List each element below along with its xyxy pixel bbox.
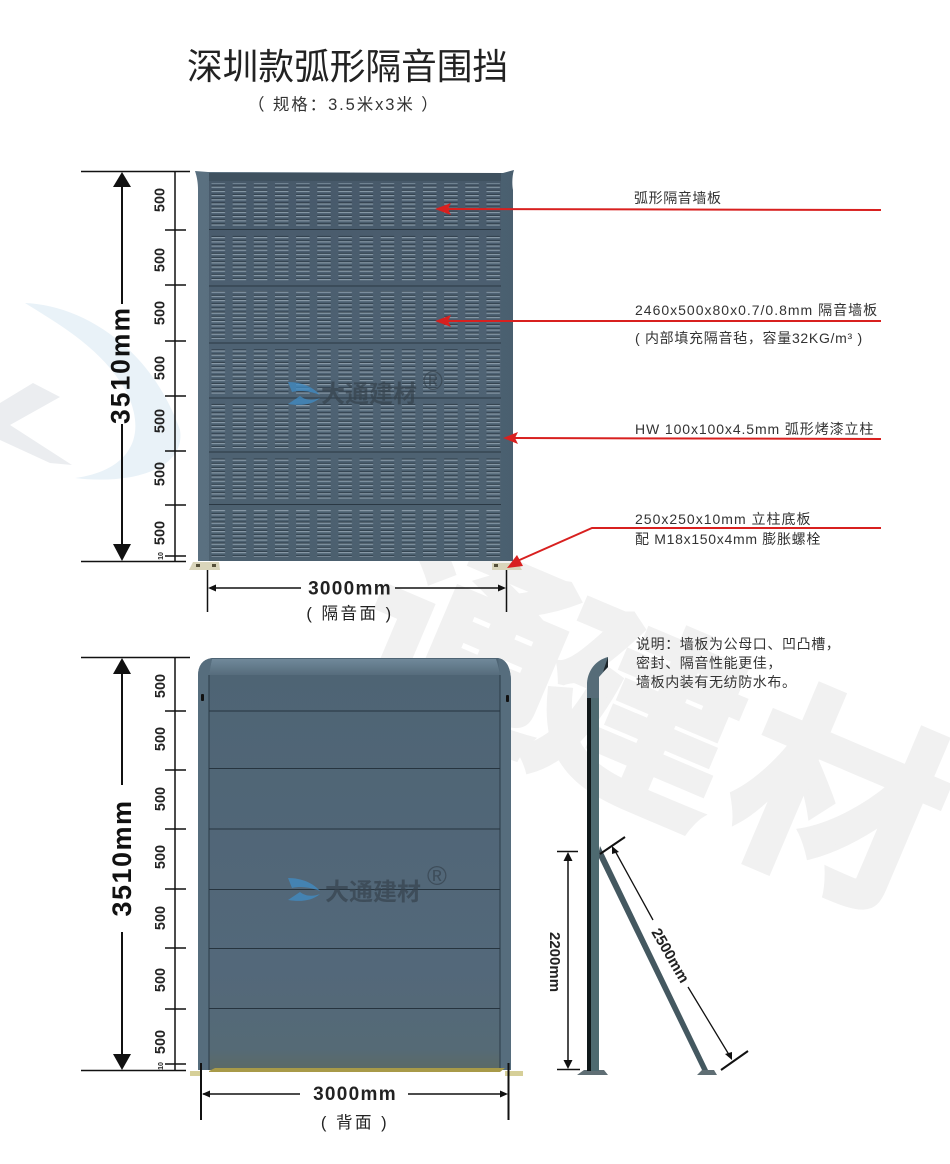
dimension 2500mm: 2500mm	[648, 925, 692, 986]
callout: base plate: 配 M18x150x4mm 膨胀螺栓	[635, 531, 821, 547]
callout: column	[503, 421, 881, 444]
front dimension: height 3510mm	[81, 172, 190, 562]
back panel	[190, 658, 523, 1076]
side view of column and strut	[577, 657, 717, 1075]
back dimension: height 3510mm: 10	[158, 1062, 165, 1070]
back dimension: height 3510mm: 500	[153, 906, 169, 930]
back logo watermark	[288, 861, 447, 906]
front dimension: height 3510mm: 500	[152, 356, 168, 380]
dimension 2200mm: 2200mm	[546, 932, 563, 992]
front logo watermark: 大通建材	[321, 381, 417, 408]
front dimension: height 3510mm: 500	[152, 521, 168, 545]
back logo watermark: ®	[427, 861, 447, 891]
callout: column: HW 100x100x4.5mm 弧形烤漆立柱	[635, 421, 874, 437]
front dimension: height 3510mm: 500	[152, 301, 168, 325]
front dimension: height 3510mm: 10	[158, 552, 165, 560]
back dimension: height 3510mm: 500	[153, 845, 169, 869]
explanation note: 说明：墙板为公母口、凹凸槽，	[636, 636, 840, 652]
callout: sound barrier panel	[435, 302, 881, 346]
title: 深圳款弧形隔音围挡	[187, 47, 508, 87]
explanation note: 密封、隔音性能更佳，	[636, 655, 782, 671]
back dimension: height 3510mm: 500	[153, 787, 169, 811]
back width dimension 3000mm	[201, 1063, 508, 1132]
callout: base plate: 250x250x10mm 立柱底板	[635, 511, 812, 527]
back dimension: height 3510mm	[81, 658, 190, 1070]
front dimension: height 3510mm: 500	[152, 409, 168, 433]
front dimension: height 3510mm: 500	[152, 188, 168, 212]
background watermark: 建	[498, 574, 776, 865]
back dimension: height 3510mm: 3510mm	[107, 799, 137, 917]
front width dimension 3000mm	[208, 570, 506, 623]
callout: curved wall panel	[435, 190, 881, 215]
front width dimension 3000mm: 3000mm	[308, 578, 392, 600]
background watermark: 通	[325, 501, 604, 792]
front logo watermark: ®	[423, 366, 443, 396]
explanation note: 墙板内装有无纺防水布。	[636, 674, 797, 690]
callout: sound barrier panel: 2460x500x80x0.7/0.8mm 隔音墙板	[635, 302, 878, 318]
back logo watermark: 大通建材	[325, 879, 421, 906]
background watermark	[0, 303, 950, 950]
back dimension: height 3510mm: 500	[153, 968, 169, 992]
dimension 2200mm	[546, 852, 580, 1070]
front dimension: height 3510mm: 500	[152, 248, 168, 272]
callout: sound barrier panel: ( 内部填充隔音毡，容量32KG/m³ )	[635, 330, 863, 346]
front logo watermark	[288, 366, 443, 408]
back dimension: height 3510mm: 500	[153, 674, 169, 698]
dimension 2500mm	[600, 837, 748, 1070]
callout: curved wall panel: 弧形隔音墙板	[634, 190, 722, 206]
back dimension: height 3510mm: 500	[153, 1030, 169, 1054]
front noise barrier panel	[189, 170, 522, 570]
back dimension: height 3510mm: 500	[153, 727, 169, 751]
back width dimension 3000mm: ( 背面 )	[321, 1113, 389, 1132]
front dimension: height 3510mm: 3510mm	[106, 306, 136, 424]
front dimension: height 3510mm: 500	[152, 462, 168, 486]
front width dimension 3000mm: ( 隔音面 )	[306, 604, 394, 623]
back width dimension 3000mm: 3000mm	[313, 1084, 397, 1105]
subtitle: （ 规格：3.5米x3米 ）	[248, 95, 440, 114]
callout: base plate	[507, 511, 881, 568]
